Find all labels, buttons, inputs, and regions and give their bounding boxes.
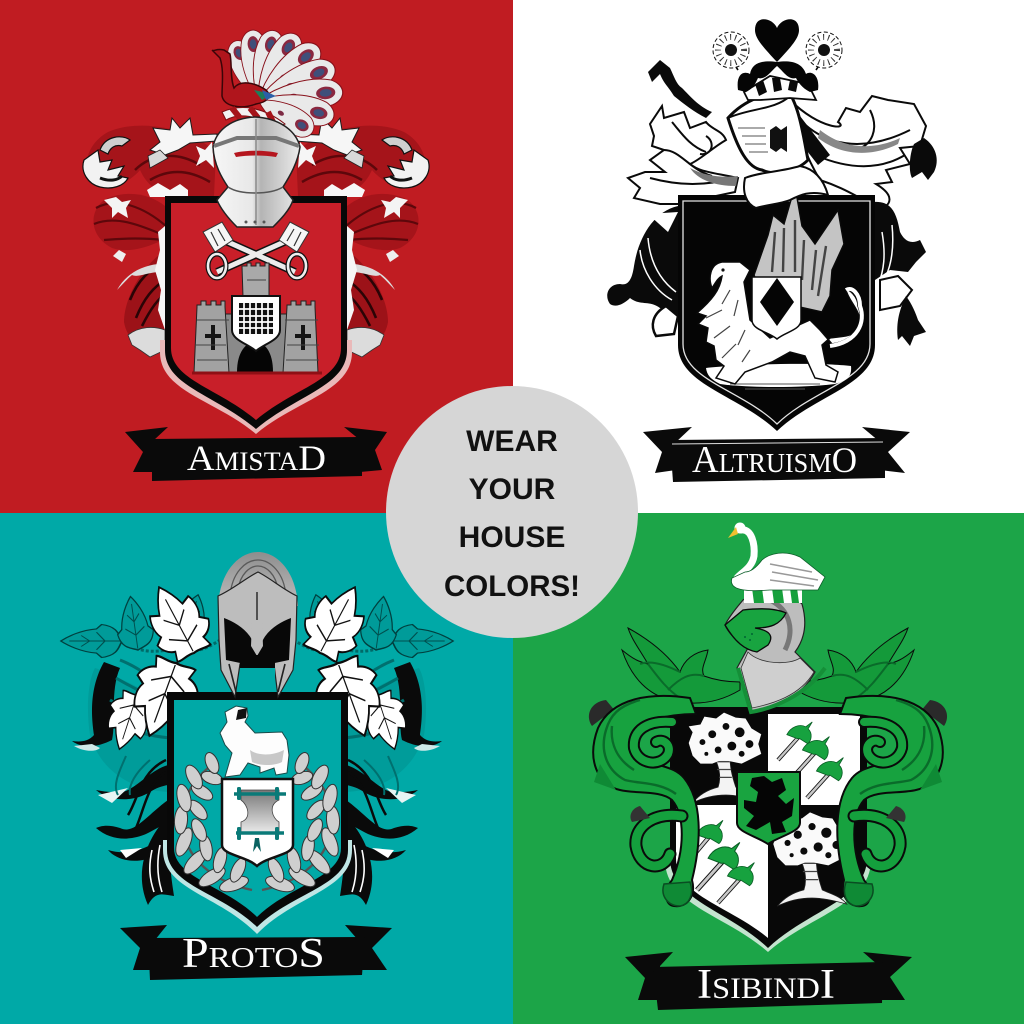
callout: center circle	[386, 386, 638, 638]
banner: Isibindi	[625, 952, 912, 1010]
icon: griffin	[697, 186, 862, 384]
icon: peacock	[212, 27, 344, 143]
icon: helmet and crest	[728, 76, 828, 208]
mantling left: black and white foliage	[607, 60, 738, 336]
icon: three halberds top-right	[770, 715, 852, 806]
icon: three halberds bottom-left	[679, 813, 763, 911]
icon: small shield with scroll	[222, 779, 293, 866]
text: slogan	[444, 425, 580, 603]
banner: Protos	[120, 925, 392, 980]
icon: crossed keys	[203, 222, 309, 278]
panel: Protos crest	[61, 552, 453, 980]
text: slogan: YOUR	[469, 473, 556, 506]
panel: Isibindi crest	[589, 522, 947, 1010]
icon: small shield with diamond	[752, 277, 801, 339]
panel: Altruismo crest	[607, 19, 937, 482]
label: PROTOS: PROTO S	[182, 931, 325, 977]
background quadrant: green	[513, 513, 1024, 1024]
icon: oak tree bottom-right	[773, 812, 849, 906]
icon: spartan helmet	[218, 552, 298, 697]
background quadrant: red	[0, 0, 513, 513]
text: slogan: HOUSE	[459, 521, 565, 554]
icon: heart and flowers	[713, 19, 842, 92]
banner: Altruismo	[643, 427, 910, 482]
label: AMISTAD: AMISTAD	[187, 438, 326, 478]
shield: Altruismo	[678, 195, 875, 431]
mantling: green scrolls	[589, 628, 947, 906]
text: slogan: COLORS!	[444, 570, 580, 603]
mantling right: black and white foliage	[786, 96, 937, 346]
label: ALTRUISMO: ALTRUISMO	[692, 439, 857, 481]
icon: knight helmet	[213, 117, 300, 227]
shield: Protos	[163, 692, 352, 934]
label: ISIBINDI: ISIBINDI	[697, 962, 835, 1008]
icon: small green shield with lion	[737, 772, 800, 844]
icon: oak tree top-left	[689, 713, 761, 803]
mantling: teal and white leaves	[61, 574, 453, 905]
banner: Amistad	[125, 427, 387, 481]
icon: castle	[192, 263, 322, 373]
mantling: red scrolls	[83, 118, 429, 357]
shield: Isibindi quartered	[665, 707, 871, 952]
icon: bear	[220, 706, 289, 777]
text: slogan: WEAR	[466, 425, 558, 458]
icon: swan	[728, 522, 825, 591]
background quadrant: white	[513, 0, 1024, 513]
shield: Amistad	[160, 196, 352, 434]
icon: laurel wreath	[172, 751, 342, 895]
background quadrant: teal	[0, 513, 513, 1024]
panel: Amistad crest	[83, 27, 429, 481]
icon: knight helmet	[725, 588, 825, 713]
